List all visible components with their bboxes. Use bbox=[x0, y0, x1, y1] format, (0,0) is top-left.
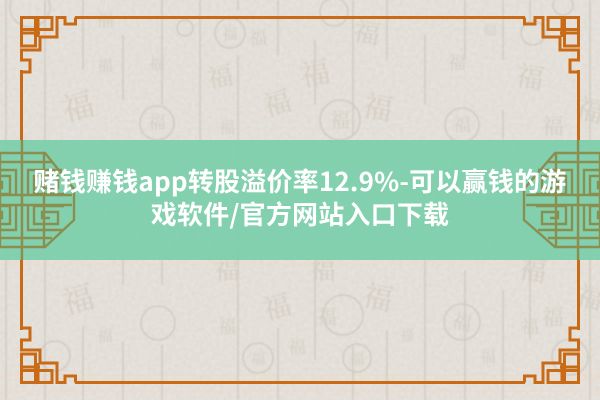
faint background characters: 福 bbox=[542, 305, 564, 330]
title bbox=[34, 162, 566, 232]
faint background characters: 福 bbox=[449, 309, 475, 336]
left octagon ornament bbox=[0, 140, 74, 260]
faint background characters: 福 bbox=[310, 256, 336, 285]
faint background characters: 福 bbox=[97, 57, 113, 75]
title: 戏软件/官方网站入口下载 bbox=[151, 195, 449, 232]
faint background characters: 福 bbox=[513, 60, 546, 96]
faint background characters: 福 bbox=[400, 328, 414, 344]
faint background characters: 福 bbox=[480, 348, 496, 366]
faint background characters: 福 bbox=[298, 56, 333, 93]
faint background characters: 福 bbox=[360, 89, 396, 128]
faint background characters: 福 bbox=[249, 28, 267, 48]
faint background characters: 福 bbox=[448, 53, 466, 73]
faint background characters: 福 bbox=[542, 114, 564, 139]
faint background characters: 福 bbox=[58, 85, 98, 129]
faint background characters: 福 bbox=[521, 317, 539, 337]
faint background characters: 福 bbox=[516, 253, 549, 289]
faint background characters: 福 bbox=[330, 109, 350, 132]
faint background characters: 福 bbox=[317, 306, 337, 329]
faint background characters: 福 bbox=[453, 115, 471, 135]
faint background characters: 福 bbox=[58, 278, 98, 322]
faint background characters: 福 bbox=[483, 23, 497, 39]
faint background characters: 福 bbox=[250, 351, 266, 368]
faint background characters: 福 bbox=[218, 317, 236, 337]
faint background characters: 福 bbox=[288, 337, 306, 357]
faint background characters: 福 bbox=[148, 113, 166, 133]
faint background characters: 福 bbox=[352, 17, 382, 50]
faint background characters: 福 bbox=[205, 61, 235, 94]
faint background characters: 福 bbox=[214, 256, 240, 285]
faint background characters: 福 bbox=[96, 10, 114, 30]
faint background characters: 福 bbox=[260, 289, 295, 327]
faint background characters: 福 bbox=[219, 119, 235, 137]
faint background characters: 福 bbox=[149, 55, 165, 73]
faint background characters: 福 bbox=[360, 279, 396, 318]
right octagon ornament bbox=[524, 140, 600, 260]
green banner bbox=[0, 140, 600, 260]
faint background characters: 福 bbox=[349, 351, 365, 368]
faint background characters: 福 bbox=[222, 26, 238, 43]
faint background characters: 福 bbox=[97, 327, 113, 345]
title: 赌钱赚钱app转股溢价率12.9%-可以赢钱的游 bbox=[34, 162, 566, 199]
faint background characters: 福 bbox=[260, 85, 295, 123]
